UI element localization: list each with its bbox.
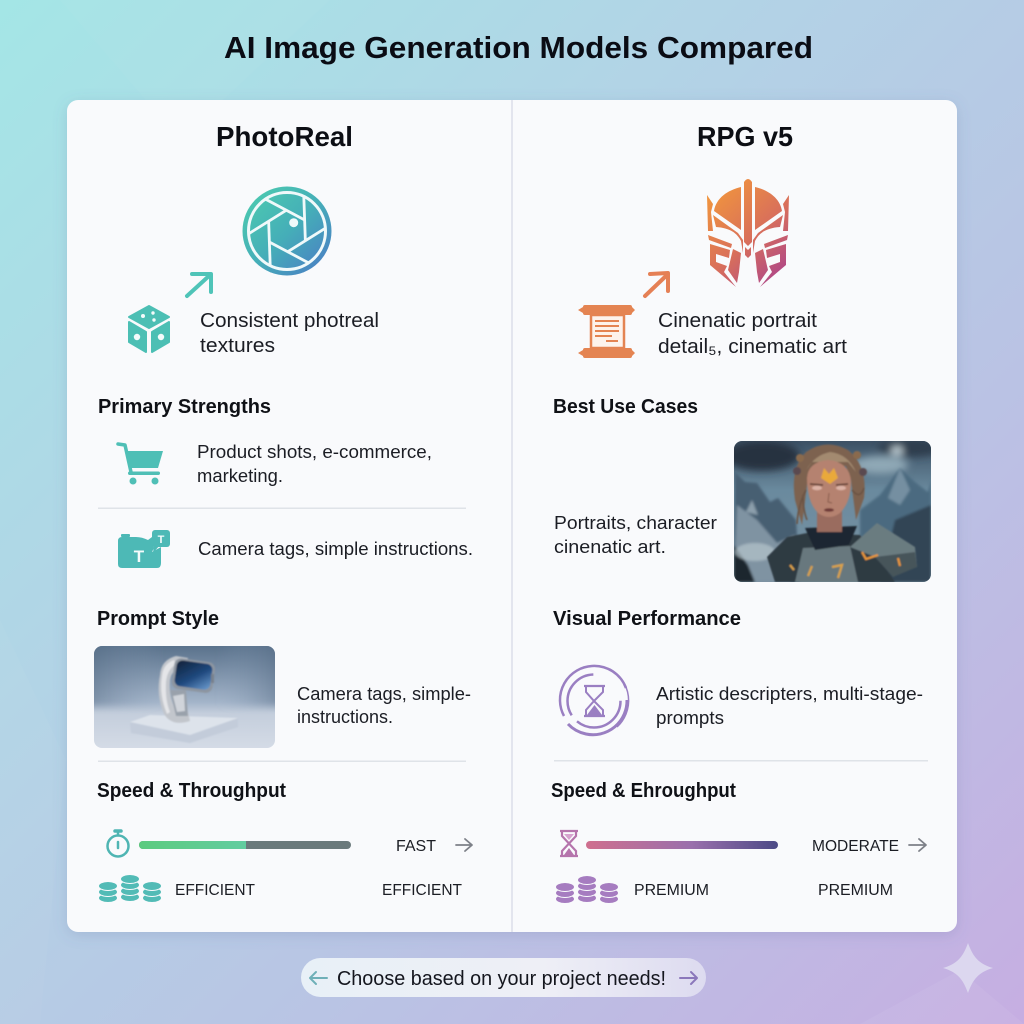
- speed bar: fast: [139, 841, 351, 849]
- icon: stopwatch: [108, 831, 128, 856]
- text: prompt style: [297, 684, 471, 727]
- heading: Speed and Ehroughput: Speed & Ehroughput: [551, 780, 736, 802]
- icon: hourglass: [560, 831, 578, 856]
- summary text: detail₅, cinematic art: [658, 336, 847, 358]
- RPG v5 heading: RPG v5: [697, 121, 793, 152]
- icon: coin stacks purple: [556, 876, 618, 904]
- heading: Visual Performance: Visual Performance: [553, 608, 741, 630]
- summary text: [200, 310, 379, 357]
- icon: sparkle: [943, 943, 993, 993]
- text: prompt style: instructions.: [297, 707, 393, 727]
- heading: Prompt Style: Prompt Style: [97, 608, 219, 630]
- text: strengths: marketing.: [197, 466, 283, 486]
- heading: Speed and Throughput: Speed & Throughput: [97, 780, 286, 802]
- icon: coin stacks teal: [98, 874, 162, 902]
- text: use cases: [554, 513, 717, 557]
- icon: scroll: [578, 305, 635, 358]
- summary text: [658, 310, 847, 358]
- summary text: textures: [200, 335, 275, 357]
- speed bar: moderate: [586, 841, 778, 849]
- text: prompt style: Camera tags, simple-: [297, 684, 471, 704]
- text: strengths: [197, 442, 432, 486]
- icon: camera aperture: [242, 186, 332, 276]
- icon: camera with speech tag: [118, 530, 170, 568]
- text: use cases: cinenatic art.: [554, 537, 666, 557]
- heading: Primary Strengths: Primary Strengths: [98, 396, 271, 418]
- icon: camera with speech tag: T: [158, 534, 165, 546]
- arrow: up right: [187, 274, 211, 296]
- panel: PhotoReal: [70, 121, 473, 902]
- text: camera tags: Camera tags, simple instructions.: [198, 539, 473, 559]
- text: visual performance: Artistic descripters, multi-stage-: [656, 684, 923, 704]
- label: efficient: EFFICIENT: [175, 882, 255, 899]
- text: use cases: Portraits, character: [554, 513, 717, 533]
- comparison card: [67, 100, 957, 932]
- arrow: up right orange: [645, 273, 668, 296]
- arrow: left: [310, 972, 327, 984]
- callout text: Choose based on your project needs!: [337, 968, 666, 990]
- icon: hourglass swirl: [560, 666, 629, 735]
- image: smartwatch product shot: [94, 646, 275, 748]
- arrow: right: [909, 839, 926, 851]
- summary text: Consistent photreal: [200, 310, 379, 332]
- label: premium second: PREMIUM: [818, 882, 893, 899]
- icon: dice: [129, 306, 169, 352]
- callout: choose based on project needs: [301, 958, 706, 997]
- image: fantasy character portrait: [734, 441, 931, 582]
- arrow: right: [456, 839, 472, 851]
- label: moderate: MODERATE: [812, 838, 899, 855]
- icon: shopping cart: [118, 444, 163, 484]
- label: premium: PREMIUM: [634, 882, 709, 899]
- title: AI Image Generation Models Compared: [224, 30, 813, 65]
- heading: Best Use Cases: Best Use Cases: [553, 396, 698, 418]
- label: efficient second: EFFICIENT: [382, 882, 462, 899]
- label: fast: FAST: [396, 838, 436, 855]
- arrow: right: [680, 972, 697, 984]
- text: visual performance: [656, 684, 923, 728]
- icon: knight helmet: [707, 179, 789, 287]
- summary text: Cinenatic portrait: [658, 310, 817, 332]
- text: visual performance: prompts: [656, 708, 724, 728]
- panel: RPG v5: [551, 121, 942, 904]
- icon: camera with speech tag: T: [134, 547, 145, 566]
- PhotoReal heading: PhotoReal: [216, 121, 353, 152]
- text: strengths: Product shots, e-commerce,: [197, 442, 432, 462]
